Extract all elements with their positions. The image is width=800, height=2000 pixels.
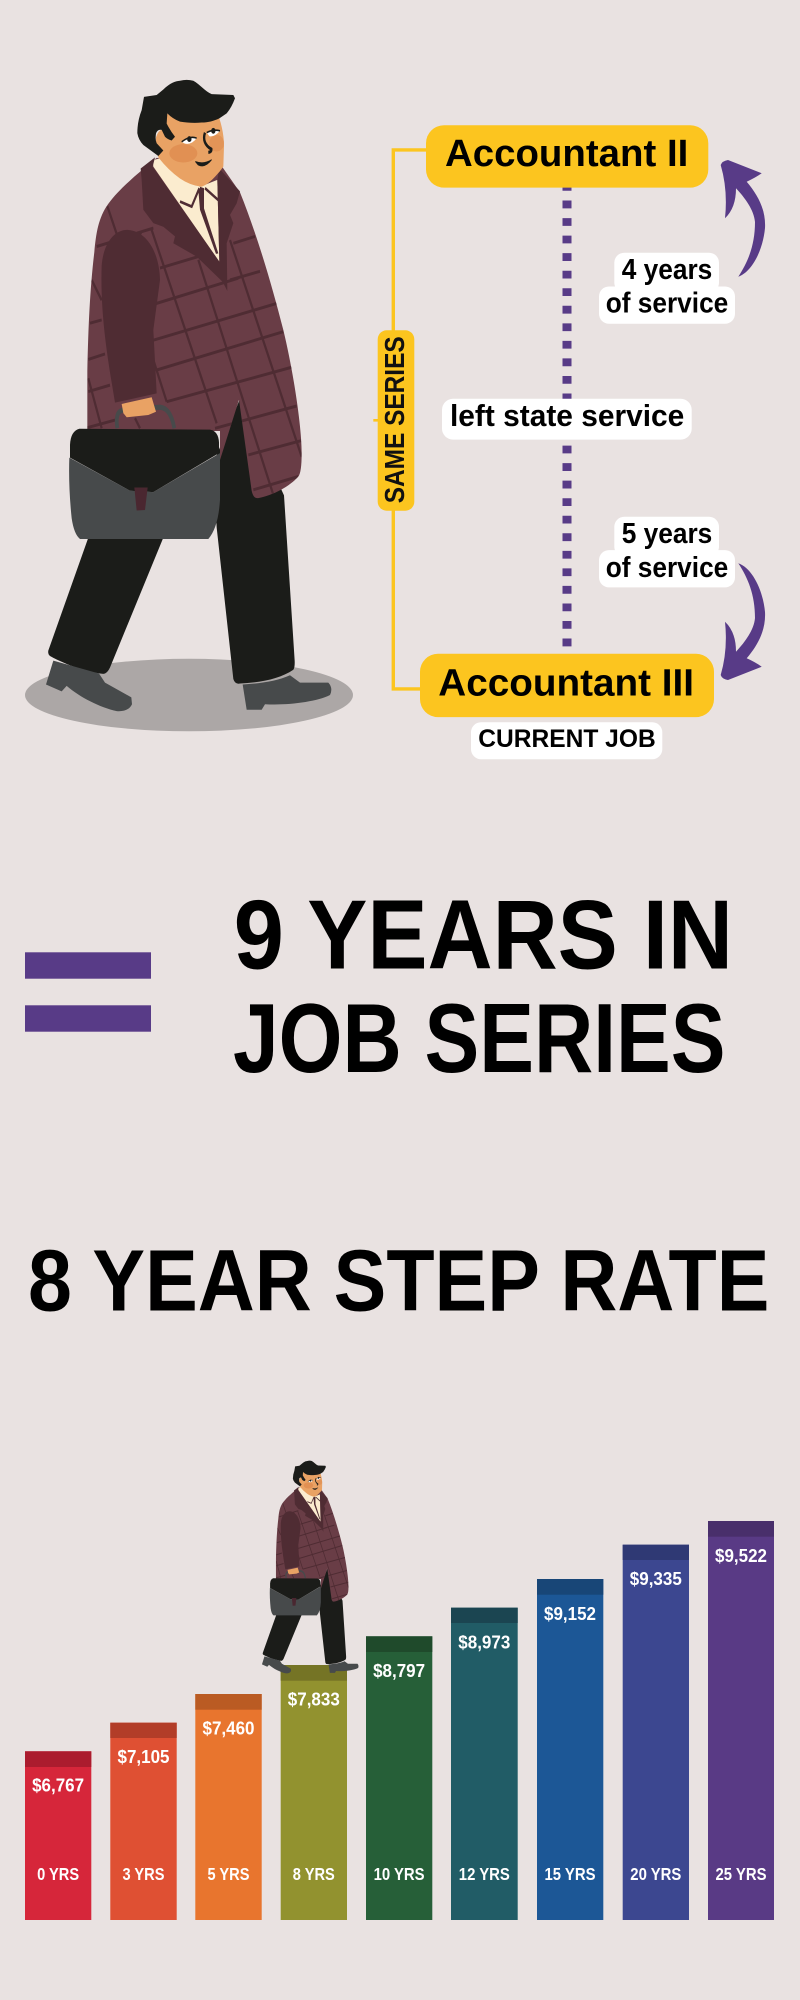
bar: 20 yrs: 20 YRS: [630, 1864, 681, 1884]
label: 4 years of service: 4 years: [622, 254, 712, 286]
bar: 0 yrs: 0 YRS: [37, 1864, 79, 1884]
icon: equals sign: [25, 952, 151, 1032]
shoes: [46, 661, 331, 711]
bracket: same series connector: [373, 150, 426, 689]
plaid coat: [85, 158, 302, 498]
bar: 12 yrs: 12 YRS: [459, 1864, 510, 1884]
hair: [137, 80, 235, 156]
bar: 0 yrs: $6,767: [32, 1775, 84, 1796]
bar: 25 yrs: 25 YRS: [716, 1864, 766, 1884]
bar: 20 yrs: [623, 1545, 689, 1920]
bar: 5 yrs: [195, 1694, 262, 1920]
label: left state service: left state service: [450, 398, 684, 433]
illustration: businessman standing on 8 yrs bar: [262, 1461, 359, 1673]
label: 5 years of service: [599, 517, 735, 587]
bar: 15 yrs: 15 YRS: [544, 1864, 596, 1884]
bar: 5 yrs: $7,460: [202, 1718, 254, 1738]
job box: Accountant III: [420, 654, 714, 717]
arrow: up to Accountant II: [721, 160, 765, 277]
heading: 9 years in job series: [233, 879, 733, 1093]
bar: 15 yrs: $9,152: [544, 1603, 596, 1624]
bar: 10 yrs: 10 YRS: [374, 1864, 425, 1884]
businessman figure: [46, 80, 331, 711]
bar chart: step rate by years of service: [25, 1521, 774, 1920]
heading: 9 years in job series: 9 YEARS IN: [234, 879, 733, 989]
bar: 10 yrs: $8,797: [373, 1660, 425, 1681]
face: [156, 113, 224, 187]
coat collar: [141, 157, 240, 291]
bar: 3 yrs: 3 YRS: [122, 1864, 164, 1884]
bar: 25 yrs: $9,522: [715, 1545, 767, 1566]
arrow: down to Accountant III: [721, 563, 765, 680]
bar: 20 yrs: $9,335: [630, 1568, 682, 1589]
bar: 15 yrs: [537, 1579, 603, 1920]
bar: 12 yrs: [451, 1608, 518, 1920]
ground shadow: [25, 659, 353, 731]
job box: Accountant II: Accountant II: [445, 133, 688, 175]
briefcase: [69, 429, 220, 539]
job box: Accountant II: [426, 125, 708, 188]
trousers: [48, 399, 295, 684]
bar: 3 yrs: $7,105: [118, 1746, 170, 1767]
label: same series: SAME SERIES: [379, 336, 410, 503]
arm and hand: [101, 230, 174, 428]
bar: 8 yrs: 8 YRS: [293, 1864, 335, 1884]
label: current job: CURRENT JOB: [478, 725, 656, 753]
bar: 12 yrs: $8,973: [458, 1631, 510, 1652]
shirt and tie: [153, 158, 219, 262]
bar: 25 yrs: [708, 1521, 774, 1920]
bar: 10 yrs: [366, 1636, 432, 1920]
label: 4 years of service: of service: [606, 288, 728, 320]
bar: 8 yrs: $7,833: [288, 1689, 340, 1710]
bar: 8 yrs: [281, 1665, 347, 1920]
bar: 5 yrs: 5 YRS: [208, 1864, 250, 1884]
bar: 3 yrs: [110, 1723, 177, 1920]
label: 4 years of service: [599, 253, 735, 324]
job box: Accountant III: Accountant III: [438, 662, 694, 704]
label: 5 years of service: 5 years: [622, 518, 712, 550]
label: 5 years of service: of service: [606, 552, 728, 584]
illustration: walking businessman with ground shadow: [25, 80, 353, 731]
dotted career path line: [562, 183, 572, 648]
bar: 0 yrs: [25, 1751, 91, 1920]
